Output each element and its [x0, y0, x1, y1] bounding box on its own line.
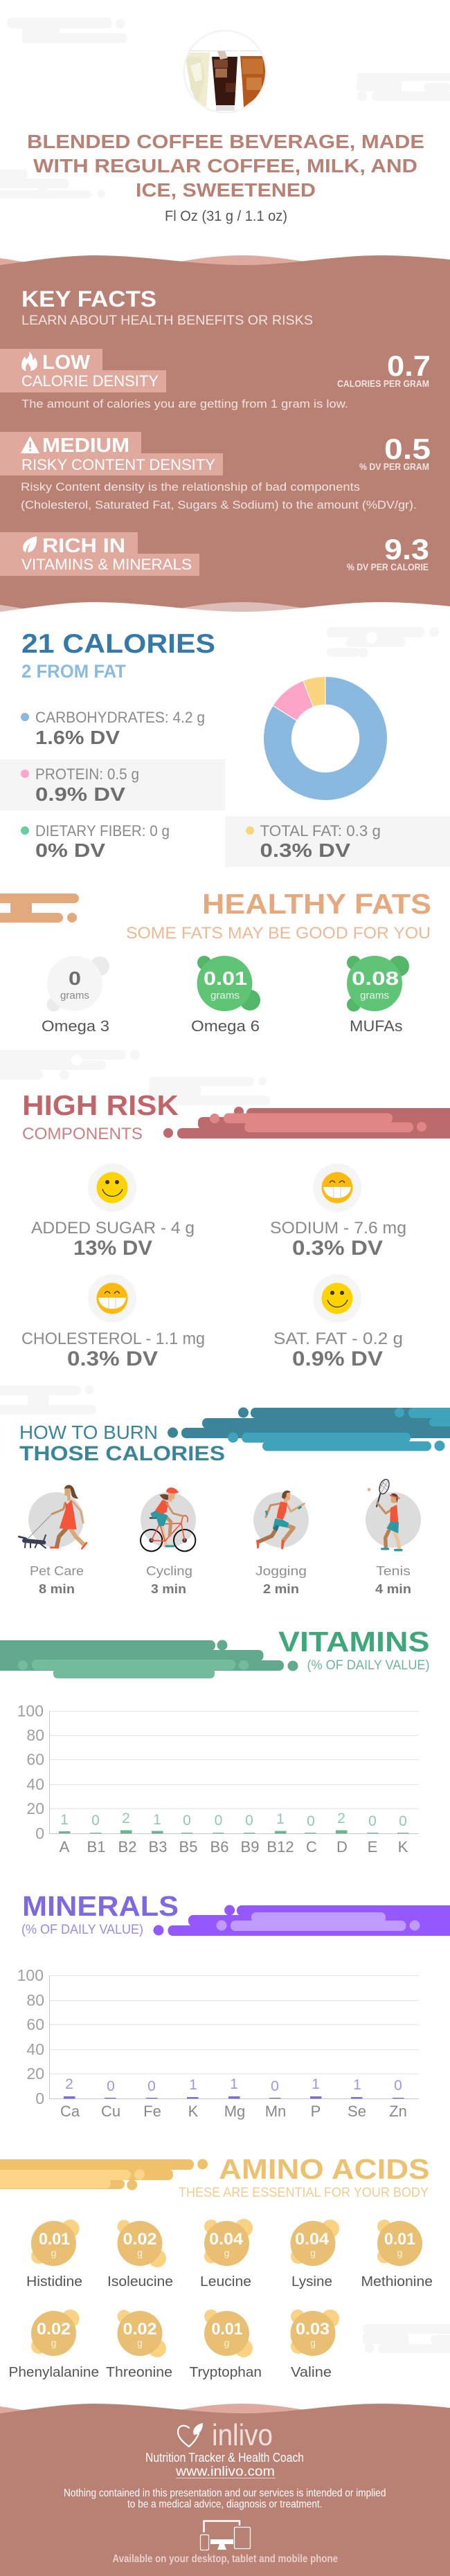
bar chart: vitamins: 1 — [153, 1812, 161, 1828]
fat: mufas: grams — [360, 990, 389, 1001]
decoration: high risk band — [163, 1107, 450, 1139]
bar chart: vitamins: 1 — [60, 1812, 69, 1828]
bar chart: vitamins: B12 — [267, 1838, 294, 1856]
bar chart: vitamins: 0 — [399, 1813, 407, 1829]
heading: amino acids — [179, 2153, 429, 2200]
stat: dv per calorie — [347, 533, 429, 572]
amino: phenylalanine — [8, 2310, 99, 2380]
risk: sodium: 0.3% DV — [292, 1237, 383, 1260]
risk: added sugar: 13% DV — [73, 1237, 152, 1260]
label: jogging — [255, 1564, 307, 1596]
amino: methionine: g — [397, 2247, 402, 2258]
amino: methionine: 0.01 — [384, 2230, 415, 2249]
amino: tryptophan — [190, 2310, 262, 2380]
risk: added sugar — [31, 1163, 195, 1260]
decoration: minerals band — [154, 1905, 450, 1936]
badge: medium risky content density: MEDIUM — [42, 435, 129, 457]
stat: dv per gram: 0.5 — [384, 433, 431, 465]
icon: warning — [21, 436, 39, 453]
amino: lysine: 0.04 — [295, 2230, 330, 2249]
label: tennis — [375, 1564, 411, 1596]
subheading: amino acids: THESE ARE ESSENTIAL FOR YOUR BODY — [179, 2186, 429, 2200]
subheading: healthy fats: SOME FATS MAY BE GOOD FOR YOU — [126, 924, 431, 943]
fat: mufas: MUFAs — [350, 1017, 403, 1035]
bar chart: vitamins: C — [306, 1838, 317, 1856]
disclaimer: to be a medical advice, diagnosis or treatment. — [127, 2498, 323, 2510]
amino: tryptophan: Tryptophan — [190, 2365, 262, 2380]
macro: total fat — [246, 822, 381, 861]
amino: lysine — [291, 2220, 339, 2289]
amino: valine: 0.03 — [296, 2320, 330, 2339]
heading: healthy fats: HEALTHY FATS — [202, 888, 431, 920]
amino: isoleucine: 0.02 — [123, 2230, 156, 2249]
subheading: components: COMPONENTS — [22, 1125, 143, 1143]
macro: carbohydrates: CARBOHYDRATES: 4.2 g — [35, 709, 205, 726]
macro: dietary fiber — [21, 822, 170, 861]
macro: protein — [21, 765, 139, 805]
bar chart: minerals: Fe — [143, 2103, 161, 2120]
title — [27, 131, 424, 201]
decoration: amino acids band — [0, 2159, 208, 2190]
fat: omega 3 — [42, 956, 109, 1035]
heading: how to burn: THOSE CALORIES — [19, 1442, 225, 1465]
stat: dv per gram: % DV PER GRAM — [359, 461, 429, 472]
tagline: Nutrition Tracker & Health Coach — [145, 2451, 304, 2465]
heading: high risk: HIGH RISK — [22, 1089, 179, 1121]
bar chart: minerals: Zn — [389, 2103, 407, 2120]
badge: rich in vitamins and minerals: VITAMINS & MINERALS — [21, 556, 192, 573]
label: jogging: 2 min — [263, 1582, 299, 1596]
fat: omega 3: grams — [60, 990, 89, 1001]
bar chart: vitamins: D — [336, 1838, 348, 1856]
amino: isoleucine: g — [137, 2247, 143, 2258]
amino: valine: g — [310, 2337, 316, 2348]
amino: isoleucine — [107, 2220, 173, 2289]
subheading: percent of daily value: (% OF DAILY VALUE) — [21, 1923, 143, 1937]
bar chart: vitamins: B5 — [179, 1838, 197, 1856]
bar chart: vitamins: 2 — [122, 1811, 130, 1826]
bar chart: minerals: Mn — [265, 2103, 286, 2120]
bar chart: minerals: Se — [348, 2103, 366, 2120]
amino: phenylalanine: Phenylalanine — [8, 2365, 99, 2380]
bar chart: vitamins: 0 — [245, 1813, 253, 1829]
bar chart: minerals: P — [311, 2103, 321, 2120]
macro: dietary fiber: 0% DV — [35, 840, 105, 861]
stat: dv per calorie: 9.3 — [384, 533, 429, 565]
title: BLENDED COFFEE BEVERAGE, MADE — [27, 131, 424, 152]
description: risky content density: Risky Content density is the relationship of bad components — [21, 480, 360, 493]
badge: low calorie density: CALORIE DENSITY — [21, 372, 159, 390]
risk: sodium: SODIUM - 7.6 mg — [270, 1219, 406, 1237]
label: jogging: Jogging — [255, 1564, 307, 1578]
description: risky content density — [21, 480, 417, 511]
label: pet care: 8 min — [39, 1582, 75, 1596]
heading: vitamins — [278, 1626, 429, 1673]
heading: key facts: KEY FACTS — [21, 287, 156, 311]
bar chart: minerals: 60 — [26, 2015, 44, 2033]
risk: saturated fat: SAT. FAT - 0.2 g — [273, 1330, 403, 1348]
macro: protein: PROTEIN: 0.5 g — [35, 765, 139, 783]
fat: omega 6: grams — [210, 990, 240, 1001]
fat: mufas — [347, 956, 409, 1035]
fat: omega 6: 0.01 — [204, 968, 247, 989]
risk: sodium — [270, 1163, 406, 1260]
activity: tennis — [366, 1478, 421, 1596]
amino: valine — [291, 2310, 339, 2380]
subheading: percent of daily value: (% OF DAILY VALUE) — [307, 1658, 429, 1673]
amino: valine: Valine — [291, 2365, 332, 2380]
stat: calories per gram: 0.7 — [387, 350, 431, 382]
bar chart: minerals: 1 — [189, 2077, 197, 2093]
amino: histidine: g — [51, 2247, 56, 2258]
bar chart: vitamins: 0 — [368, 1813, 377, 1829]
amino: leucine: 0.04 — [209, 2230, 244, 2249]
amino: leucine — [200, 2219, 253, 2289]
activity: pet care — [19, 1485, 87, 1596]
macro: protein: 0.9% DV — [35, 783, 125, 805]
amino: threonine: g — [137, 2337, 143, 2348]
heading: how to burn: HOW TO BURN — [19, 1422, 158, 1443]
bar chart: minerals: 20 — [26, 2065, 44, 2083]
bar chart: minerals: 1 — [353, 2077, 361, 2093]
risk: cholesterol: CHOLESTEROL - 1.1 mg — [21, 1330, 205, 1348]
title: ICE, SWEETENED — [136, 179, 316, 201]
bar chart: vitamins: 60 — [26, 1750, 44, 1768]
activity: cycling — [141, 1487, 196, 1596]
bar chart: vitamins: 0 — [307, 1813, 315, 1829]
bar chart: minerals: 100 — [17, 1966, 44, 1984]
heading: vitamins: VITAMINS — [278, 1626, 429, 1658]
amino: histidine: 0.01 — [39, 2230, 70, 2249]
heading: minerals — [21, 1890, 179, 1937]
bar chart: minerals: 0 — [271, 2078, 279, 2094]
macro: dietary fiber: DIETARY FIBER: 0 g — [35, 822, 170, 840]
bar chart: minerals: 0 — [35, 2089, 44, 2107]
amino: tryptophan: g — [224, 2337, 229, 2348]
heading: amino acids: AMINO ACIDS — [219, 2153, 429, 2185]
amino: phenylalanine: 0.02 — [37, 2320, 71, 2339]
amino: lysine: g — [310, 2247, 316, 2258]
highlight bands — [0, 759, 450, 867]
panel: key facts — [0, 255, 450, 616]
macro: carbohydrates — [21, 709, 205, 748]
label: tennis: 4 min — [375, 1582, 411, 1596]
decoration: burn band — [168, 1408, 450, 1451]
description: calorie density: The amount of calories you are getting from 1 gram is low. — [21, 397, 348, 410]
decoration: vitamins band — [0, 1640, 298, 1678]
bar chart: vitamins: 0 — [91, 1813, 100, 1829]
amino: tryptophan: 0.01 — [212, 2320, 242, 2339]
bar chart: vitamins — [17, 1702, 419, 1856]
bar chart: vitamins: 1 — [276, 1811, 285, 1827]
bar chart: vitamins: 2 — [337, 1811, 345, 1826]
bar chart: vitamins: 80 — [26, 1726, 44, 1744]
badge: rich in vitamins and minerals: RICH IN — [42, 535, 125, 557]
amino: threonine: 0.02 — [123, 2320, 156, 2339]
activity: jogging — [253, 1491, 309, 1596]
amino: threonine — [106, 2310, 172, 2380]
bar chart: minerals: 0 — [107, 2078, 115, 2094]
bar chart: vitamins: 40 — [26, 1775, 44, 1793]
bar chart: minerals: Mg — [224, 2103, 245, 2120]
fat: omega 6 — [191, 956, 260, 1035]
badge: low calorie density: LOW — [42, 352, 91, 374]
panel: footer — [0, 2404, 450, 2576]
amino: isoleucine: Isoleucine — [107, 2274, 173, 2289]
bar chart: vitamins: 0 — [35, 1824, 44, 1842]
bar chart: minerals: 1 — [230, 2076, 238, 2092]
donut chart — [264, 676, 388, 800]
bar chart: vitamins: K — [398, 1838, 408, 1856]
stat: dv per gram — [359, 433, 431, 472]
icon: leaf — [23, 536, 37, 552]
badge: rich in vitamins and minerals — [0, 532, 199, 576]
heading: how to burn — [19, 1422, 225, 1465]
bar chart: minerals: Ca — [60, 2103, 80, 2120]
subheading: from fat: 2 FROM FAT — [21, 661, 126, 682]
risk: added sugar: ADDED SUGAR - 4 g — [31, 1219, 195, 1237]
stat: dv per calorie: % DV PER CALORIE — [347, 561, 429, 572]
bar chart: vitamins: B1 — [87, 1838, 105, 1856]
amino: histidine: Histidine — [26, 2274, 82, 2289]
icon: devices — [201, 2521, 251, 2550]
amino: methionine: Methionine — [361, 2274, 433, 2289]
bar chart: minerals: 40 — [26, 2040, 44, 2058]
macro: total fat: 0.3% DV — [260, 840, 350, 861]
website link: www.inlivo.com — [175, 2465, 275, 2479]
bar chart: minerals — [17, 1966, 419, 2120]
bar chart: vitamins: B9 — [241, 1838, 259, 1856]
label: pet care — [30, 1564, 84, 1596]
bar chart: minerals: 1 — [312, 2076, 320, 2092]
bar chart: minerals: 80 — [26, 1991, 44, 2009]
amino: threonine: Threonine — [106, 2365, 172, 2380]
bar chart: minerals: 2 — [65, 2076, 73, 2092]
bar chart: minerals: K — [188, 2103, 199, 2120]
badge: medium risky content density — [0, 432, 223, 475]
disclaimer: Nothing contained in this presentation and our services is intended or implied — [64, 2487, 386, 2499]
fat: mufas: 0.08 — [352, 968, 399, 989]
subheading: LEARN ABOUT HEALTH BENEFITS OR RISKS — [21, 314, 313, 328]
label: cycling: Cycling — [146, 1564, 192, 1578]
bar chart: minerals: Cu — [101, 2103, 120, 2120]
header image: three iced drinks — [183, 30, 267, 114]
bar chart: vitamins: 0 — [215, 1813, 222, 1829]
heading: calories: 21 CALORIES — [21, 629, 215, 659]
amino: leucine: g — [224, 2247, 229, 2258]
amino: leucine: Leucine — [200, 2274, 251, 2289]
macro: total fat: TOTAL FAT: 0.3 g — [260, 822, 381, 840]
bar chart: vitamins: 20 — [26, 1799, 44, 1817]
macro: carbohydrates: 1.6% DV — [35, 727, 120, 748]
label: cycling: 3 min — [151, 1582, 186, 1596]
amino: lysine: Lysine — [291, 2274, 332, 2289]
heading: minerals: MINERALS — [22, 1890, 179, 1922]
heading: calories — [21, 629, 215, 682]
bar chart: vitamins: B3 — [149, 1838, 167, 1856]
logo wordmark: inlivo — [212, 2418, 273, 2452]
icon: flame — [21, 352, 37, 371]
risk: cholesterol — [21, 1274, 205, 1370]
bar chart: vitamins: A — [60, 1838, 70, 1856]
serving size: Fl Oz (31 g / 1.1 oz) — [165, 208, 287, 224]
label: pet care: Pet Care — [30, 1564, 84, 1578]
amino: methionine — [361, 2220, 433, 2289]
disclaimer — [64, 2487, 386, 2510]
fat: omega 3: Omega 3 — [42, 1017, 109, 1035]
icon: inlivo heart logo — [178, 2423, 203, 2447]
bar chart: vitamins: 0 — [183, 1813, 191, 1829]
badge: medium risky content density: RISKY CONTENT DENSITY — [21, 456, 215, 473]
fat: omega 3: 0 — [69, 968, 81, 989]
bar chart: minerals: 0 — [394, 2078, 402, 2094]
risk: saturated fat — [273, 1274, 403, 1370]
amino: phenylalanine: g — [51, 2337, 56, 2348]
fat: omega 6: Omega 6 — [191, 1017, 260, 1035]
label: cycling — [146, 1564, 192, 1596]
stat: calories per gram: CALORIES PER GRAM — [337, 378, 429, 389]
description: risky content density: (Cholesterol, Saturated Fat, Sugars & Sodium) to the amount (%DV/gr). — [21, 498, 417, 511]
bar chart: vitamins: B6 — [210, 1838, 228, 1856]
amino: histidine — [26, 2220, 82, 2289]
title: WITH REGULAR COFFEE, MILK, AND — [33, 155, 417, 176]
badge: low calorie density — [0, 349, 166, 392]
risk: saturated fat: 0.9% DV — [292, 1348, 383, 1370]
bar chart: vitamins: E — [368, 1838, 377, 1856]
bar chart: minerals: 0 — [147, 2078, 156, 2094]
bar chart: vitamins: B2 — [118, 1838, 136, 1856]
label: tennis: Tenis — [376, 1564, 411, 1578]
stat: calories per gram — [337, 350, 431, 389]
decoration: healthy fats band — [0, 894, 79, 923]
bar chart: vitamins: 100 — [17, 1702, 44, 1720]
availability note: Available on your desktop, tablet and mobile phone — [112, 2553, 338, 2565]
risk: cholesterol: 0.3% DV — [67, 1348, 158, 1370]
